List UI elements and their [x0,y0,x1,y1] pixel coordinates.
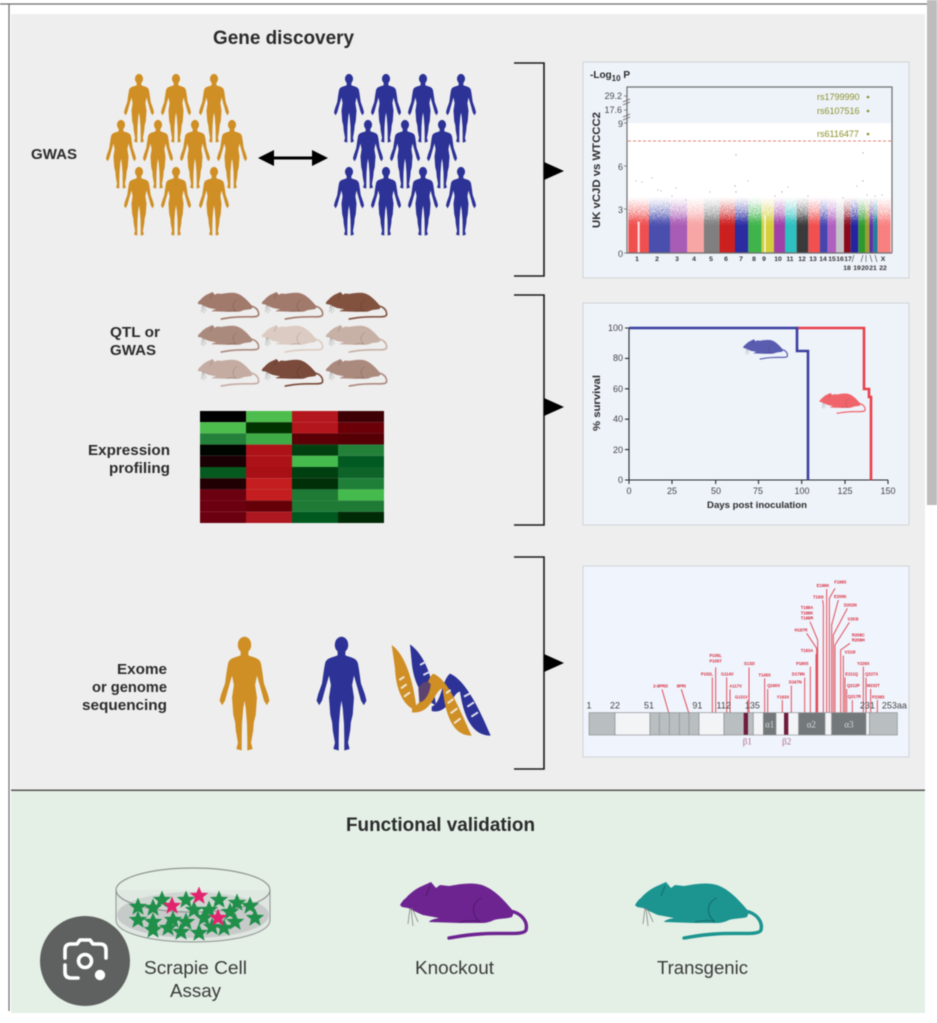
icon: blue person [317,637,366,751]
mutation labels: S132I [744,661,755,666]
panel: Manhattan plot [583,62,909,278]
y axis labels: 29.2 [604,91,622,101]
mutation labels: V203I [848,616,858,621]
label: Expression profiling: profiling [109,460,170,477]
mutation labels: T145X [759,672,771,677]
y tick labels [608,323,623,485]
chromosome labels: 1 [635,256,639,263]
mutation labels: H187R [795,627,807,632]
chromosome labels: 21 [869,265,877,272]
x tick labels [626,486,896,496]
label: Knockout: Knockout [415,957,494,978]
mutation labels: Y163X [777,694,789,699]
mutation labels: 8PRI [677,683,686,688]
label: Scrapie Cell Assay: Assay [170,980,222,1001]
position numbers: 231 [860,701,875,711]
mutation labels: R208C [852,632,865,637]
blue survival curve [629,328,808,480]
outlier points [635,152,883,201]
chromosome labels: 22 [879,265,887,272]
mutation labels: P238S [872,694,885,699]
chromosome labels: 13 [809,256,817,263]
mutation labels: E196K [817,583,829,588]
secondary structure labels: β2 [782,736,791,746]
label: Scrapie Cell Assay [144,957,247,1001]
mutation lines [662,588,877,713]
label: Expression profiling [88,442,170,477]
chromosome labels: 12 [798,256,806,263]
bracket: sequencing [514,557,544,769]
label: GWAS: GWAS [31,147,77,163]
chromosome labels: 5 [709,256,713,263]
plot frame [627,87,892,253]
arrow: sequencing to protein map [544,654,564,672]
chart axes [625,328,888,484]
secondary structure labels: α2 [807,720,816,730]
icon: DNA helix [392,644,491,736]
secondary structure labels: β1 [743,736,752,746]
mutation labels: E200K [834,594,847,599]
position numbers: 1 [586,701,591,711]
mutation labels: P102L [701,672,714,677]
pink cells [163,886,227,926]
label: QTL or GWAS: GWAS [110,343,156,359]
section divider [11,790,925,791]
x tick labels: 0 [626,486,632,496]
y axis labels [604,91,623,259]
chromosome labels: 15 [828,256,836,263]
panel: protein map [583,566,909,757]
SNP labels: rs1799990 [817,92,860,102]
mutation labels: P105L [710,653,722,658]
chromosome labels: 2 [655,256,659,263]
SNP labels: rs6107516 [817,106,860,116]
icon: red mouse [819,393,865,413]
panel: gene discovery background [11,14,925,790]
bracket: QTL and expression [514,295,544,525]
chromosome leader ticks [852,255,877,262]
icon: petri dish with cells [116,868,270,942]
chromosome labels: 16 [836,256,844,263]
y tick labels: 0 [618,475,623,485]
secondary structure labels [743,720,854,746]
mutation labels: G114V [721,672,734,677]
y axis title: UK vCJD vs WTCCC2 [591,112,603,228]
position numbers: 22 [610,701,620,711]
y tick labels: 80 [613,353,623,363]
x tick labels: 50 [711,486,721,496]
chromosome labels [635,256,887,272]
mutation labels: 2-8PRD [653,683,668,688]
axis title: -Log10 P: P [621,70,630,81]
chromosome labels: 6 [724,256,728,263]
y axis labels: 9 [618,119,623,129]
mutation labels: M232T [867,683,880,688]
label: Exome or genome sequencing [82,661,167,714]
mutation labels: T188A [801,605,813,610]
axis title: -Log10 P: 10 [612,74,621,83]
position numbers [586,701,907,711]
position numbers: 91 [692,701,702,711]
x tick labels: 100 [794,486,810,496]
label: Transgenic: Transgenic [657,957,748,978]
plot white area [627,123,892,253]
mutation labels: T183A [801,648,813,653]
mutation labels: T193I [813,594,824,599]
mutation labels: A117V [729,683,742,688]
chromosome labels: 18 [843,265,851,272]
chromosome labels: 8 [752,256,756,263]
SNP labels: rs6116477 [817,129,859,139]
y tick labels: 20 [613,445,623,455]
icon: knockout mouse [400,882,526,938]
secondary structure labels: α1 [765,720,774,730]
gold population [106,74,247,236]
mutation labels: Y226X [857,661,870,666]
mutation labels: D202N [844,603,857,608]
mutation labels: V210I [845,650,855,655]
mutation labels: D167N [789,680,802,685]
right edge scrollbar [927,0,937,505]
chromosome labels: 9 [762,256,766,263]
secondary structure labels: α3 [844,720,854,730]
chromosome labels: 20 [861,265,869,272]
x axis title: Days post inoculation [707,500,807,511]
heading: functional validation: Functional validation [346,815,535,836]
heatmap [200,411,384,523]
panel: survival chart [583,303,909,525]
chromosome labels: 14 [819,256,827,263]
mutation labels: T188K [801,610,813,615]
icon: blue mouse [743,339,787,359]
panel: QTL mice [198,292,387,386]
icon: transgenic mouse [635,882,761,938]
chromosome labels: 10 [774,256,782,263]
chromosome labels: 7 [739,256,743,263]
y axis labels: 17.6 [604,105,622,115]
arrow: GWAS to plot [544,162,564,180]
chromosome labels: X [881,256,886,263]
label: QTL or GWAS [110,325,160,359]
x tick labels: 75 [753,486,763,496]
x tick labels: 125 [837,486,853,496]
scatter speckle [628,198,891,225]
arrow: comparison [258,150,328,166]
label: Scrapie Cell Assay: Scrapie Cell [144,957,247,978]
position numbers: 135 [745,701,760,711]
icon: camera lens badge [40,916,130,1006]
mutation labels: D178N [792,672,805,677]
mutation labels: Q212P [847,683,860,688]
y axis labels: 3 [618,205,623,215]
SNP labels [817,92,869,139]
mutation labels: Q160X [767,683,780,688]
bracket: GWAS [514,63,544,276]
label: Exome or genome sequencing: Exome [117,661,167,678]
chromosome labels: 3 [675,256,679,263]
label: QTL or GWAS: QTL or [110,325,160,341]
label: Exome or genome sequencing: sequencing [82,697,167,714]
arrow: QTL to survival [544,398,564,416]
chromosome labels: 17 [844,256,852,263]
heading: gene discovery: Gene discovery [213,28,354,49]
y axis ticks [623,96,630,253]
green cells [129,890,264,941]
label: Exome or genome sequencing: or genome [92,679,167,696]
axis title: -Log10 P: -Log [590,70,612,81]
mutation labels: G131V [735,694,748,699]
mutation labels: Q227X [865,672,878,677]
chromosome labels: 19 [853,265,861,272]
mutation labels: Q217R [848,694,861,699]
panel: functional validation background [11,791,925,1013]
mutation labels: T188R [801,616,813,621]
y tick labels: 60 [613,384,623,394]
y tick labels: 40 [613,414,623,424]
y axis title: % survival [592,375,603,431]
x tick labels: 150 [880,486,896,496]
significance line [628,140,891,142]
mutation labels: P180S [796,661,809,666]
mutation labels: P105T [710,658,722,663]
protein domain bar [589,713,897,735]
chromosome labels: 4 [692,256,696,263]
red survival curve [797,328,871,480]
position numbers: 253aa [882,701,907,711]
blue population [334,74,476,236]
position numbers: 112 [717,701,731,711]
mutation labels: F198S [834,580,847,585]
mutation labels: R208H [852,637,865,642]
y tick labels: 100 [608,323,623,333]
mutation labels: E211Q [845,672,859,677]
chromosome signal bars [628,198,892,254]
beta sheets [744,713,788,735]
mutation labels [653,580,885,699]
icon: gold person [220,637,269,751]
x tick labels: 25 [667,486,677,496]
position numbers: 51 [644,701,654,711]
y axis labels: 6 [618,162,623,172]
chromosome labels: 11 [786,256,794,263]
y axis labels: 0 [618,249,623,259]
label: Expression profiling: Expression [88,442,170,459]
